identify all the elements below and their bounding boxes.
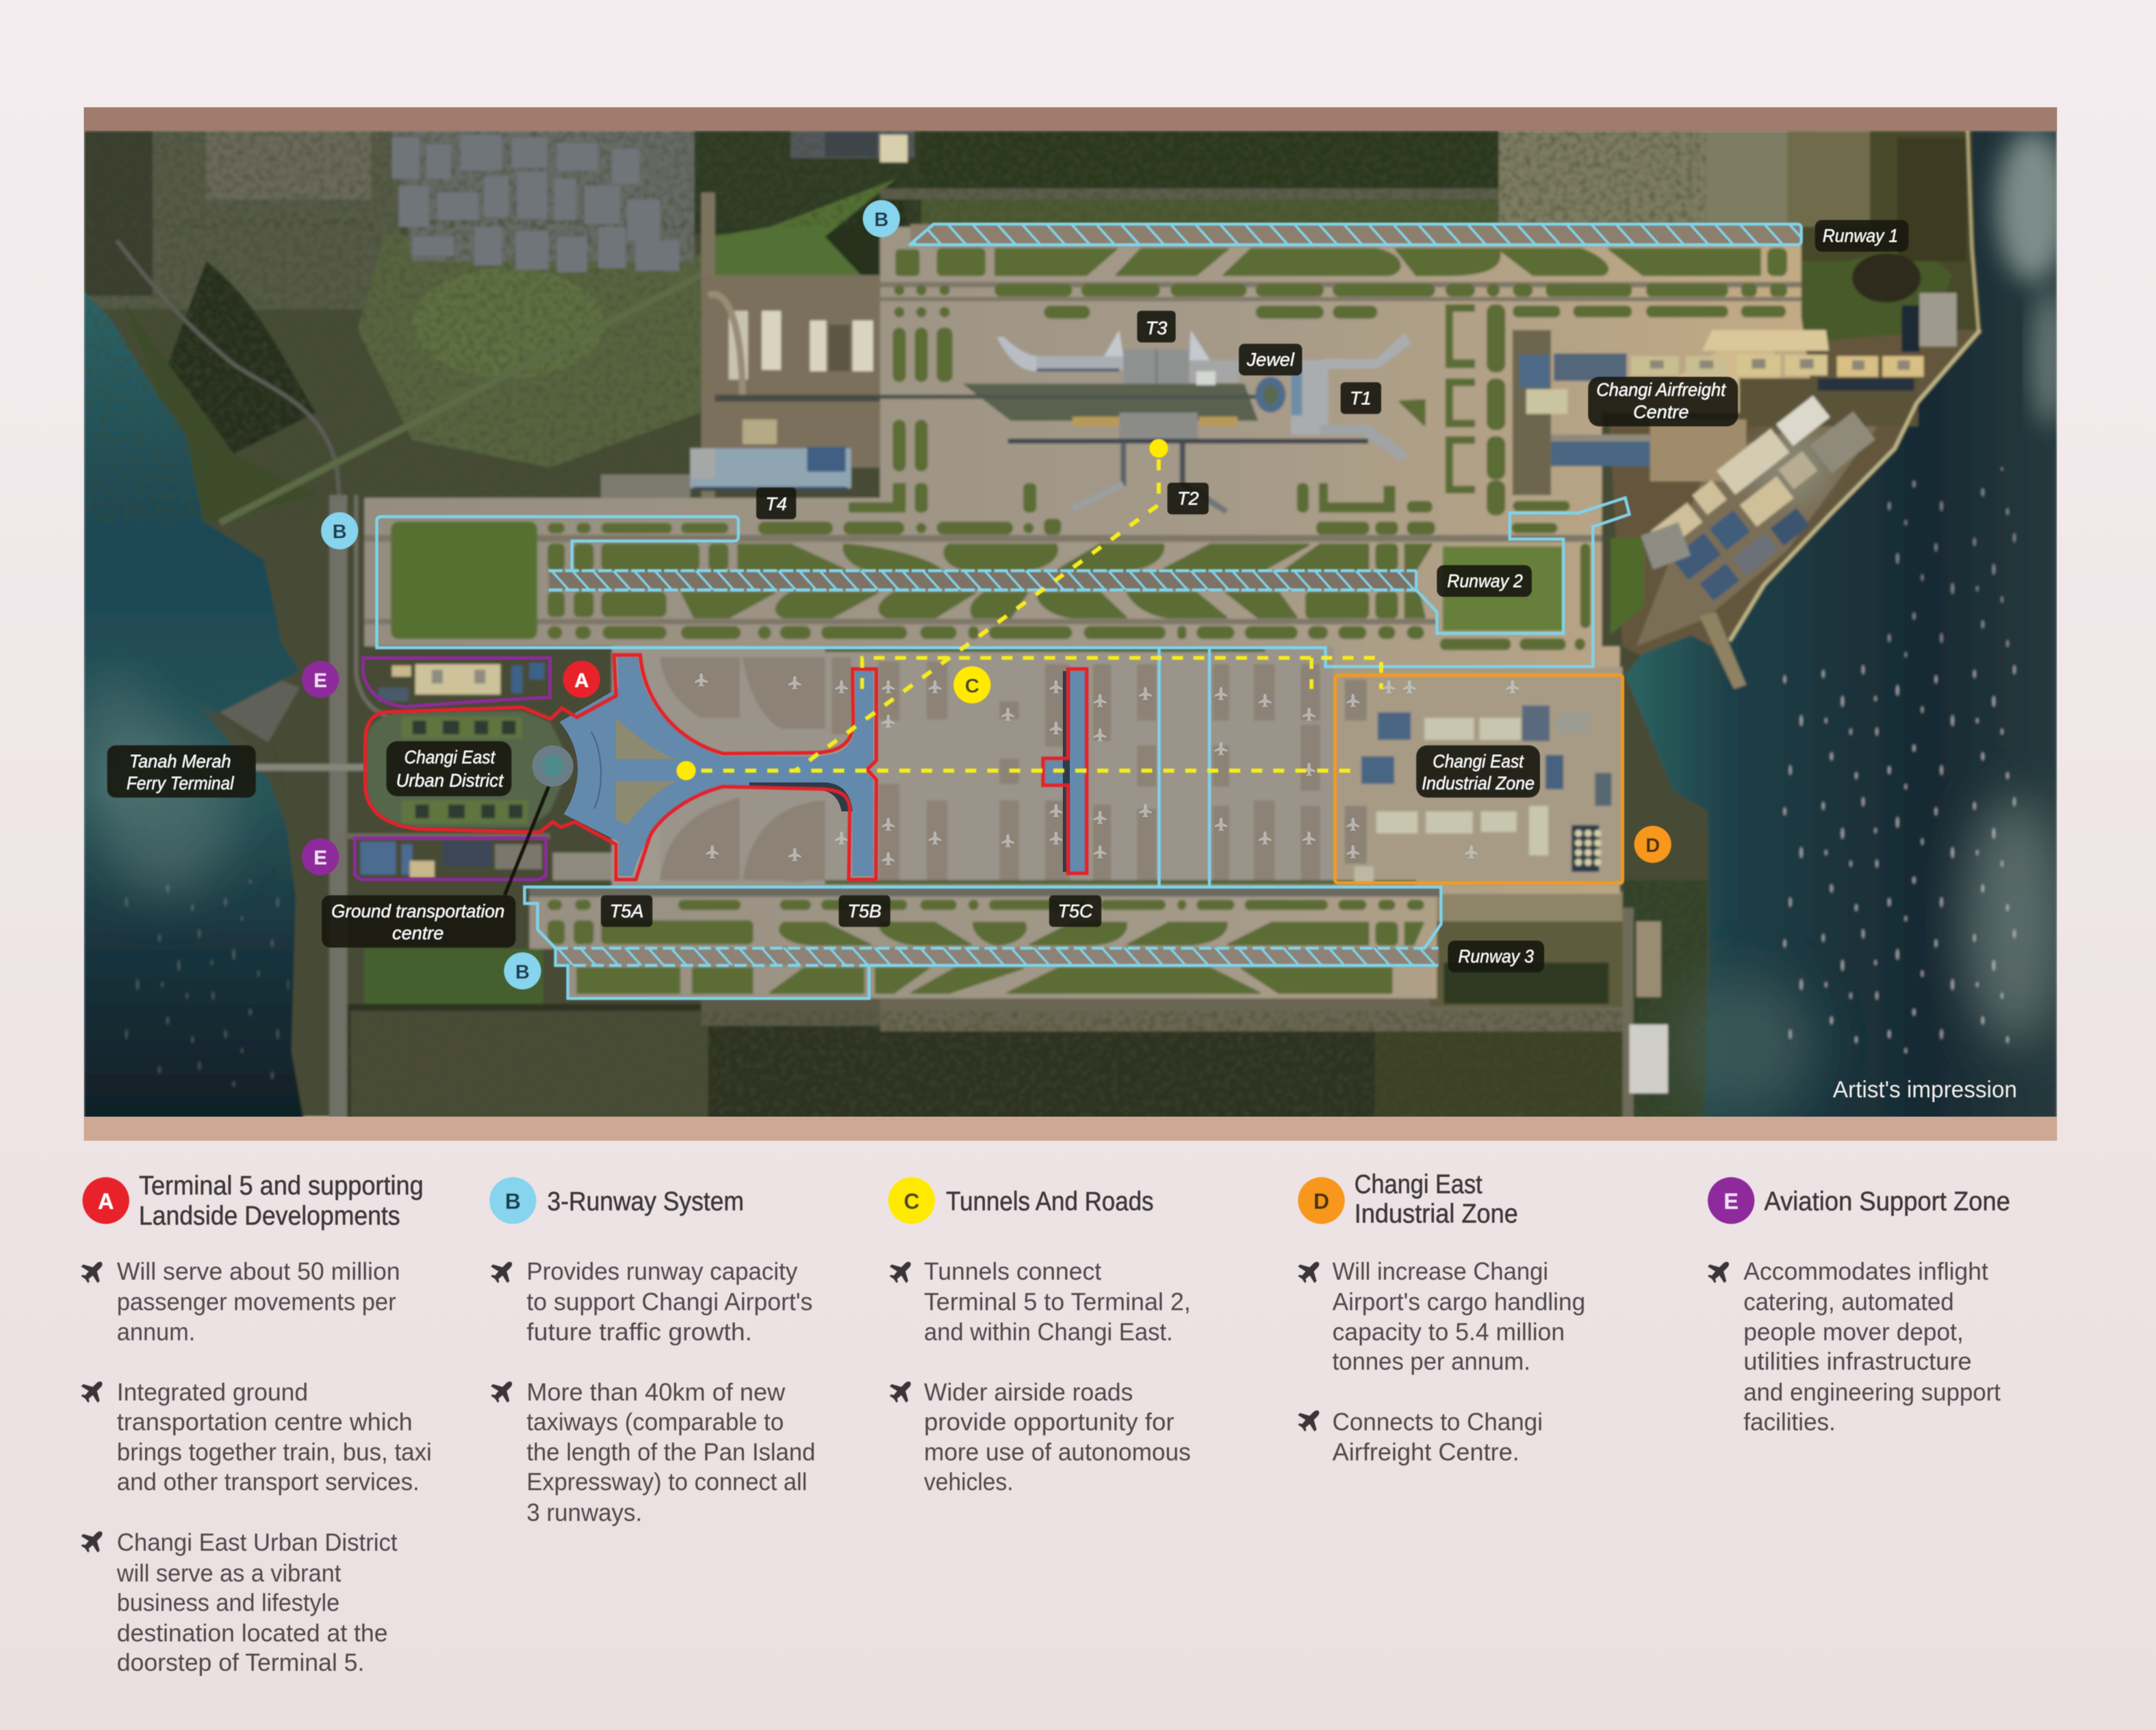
heading A — [139, 1171, 424, 1231]
badge D — [1298, 1177, 1345, 1224]
label: Runway 2 — [1437, 565, 1532, 597]
bullet E1: facilities. — [1743, 1408, 1836, 1436]
heading A: Landside Developments — [139, 1202, 400, 1231]
bullet C1: Tunnels connect — [924, 1257, 1101, 1285]
label: T5B: T5B — [847, 900, 882, 921]
label: T5A — [601, 895, 652, 927]
bullet A2: brings together train, bus, taxi — [117, 1438, 432, 1466]
zone B: apron taxi lines — [1159, 647, 1209, 887]
map badge: B runway 1 — [863, 200, 900, 237]
label: Tanah Merah Ferry Terminal: Tanah Merah — [129, 750, 231, 771]
bullet C1: Terminal 5 to Terminal 2, — [924, 1287, 1191, 1315]
bullet C2: Wider airside roads — [924, 1378, 1133, 1406]
map badge: D: D — [1645, 835, 1660, 857]
leader line: ground transportation centre — [504, 786, 549, 895]
label: Jewel — [1239, 344, 1302, 376]
zone D: industrial outline — [1335, 675, 1623, 883]
coast sand — [1968, 131, 1979, 333]
heading E: Aviation Support Zone — [1764, 1187, 2010, 1216]
aircraft — [693, 673, 1521, 868]
label: Changi East Urban District: Changi East — [405, 746, 496, 767]
row ty 455 — [549, 627, 561, 638]
map badge: E north: E — [313, 670, 327, 692]
label: Changi Airfreight Centre: Changi Airfreight — [1596, 379, 1727, 400]
bullet D2: Connects to Changi — [1333, 1408, 1543, 1436]
label: T1 — [1341, 383, 1381, 414]
column C: tunnels and roads — [888, 1177, 1191, 1496]
map badge: B runway 3: B — [515, 961, 530, 983]
zone B: runway 3 — [524, 887, 1441, 998]
neighbourhood buildings — [392, 135, 679, 272]
map badge: D — [1634, 826, 1671, 863]
hub inner garden — [542, 755, 564, 777]
label: Changi Airfreight Centre: Centre — [1633, 401, 1689, 422]
map bottom band — [84, 1117, 2057, 1141]
bullet A1: passenger movements per — [117, 1287, 396, 1315]
label: Tanah Merah Ferry Terminal: Ferry Terminal — [127, 772, 234, 793]
label: T3: T3 — [1146, 317, 1167, 338]
south rows — [549, 901, 561, 909]
bullet D1: Will increase Changi — [1333, 1257, 1548, 1285]
bullet A2 — [81, 1378, 432, 1496]
label: Runway 3 — [1448, 941, 1544, 972]
map badge: A — [563, 661, 600, 698]
label: Ground transportation centre: centre — [392, 922, 444, 944]
map badge: E north — [302, 661, 339, 698]
support-zone buildings — [344, 663, 612, 880]
zone E: south outline — [355, 838, 546, 879]
bullet C2 — [890, 1378, 1191, 1496]
bullet A2: transportation centre which — [117, 1408, 413, 1436]
map badge: E south — [302, 838, 339, 875]
aerial base image — [75, 131, 2068, 1128]
bullet A1: annum. — [117, 1317, 195, 1345]
T5 terminal building — [560, 658, 1085, 876]
label: T4: T4 — [765, 493, 787, 515]
label: Changi East Urban District — [387, 741, 511, 797]
big lawn — [392, 523, 536, 638]
label: Tanah Merah Ferry Terminal — [107, 745, 256, 798]
label: Changi East Industrial Zone: Industrial Zone — [1422, 772, 1535, 793]
bullet B1: future traffic growth. — [526, 1317, 752, 1345]
label: T5C — [1049, 895, 1101, 927]
map badge: E south: E — [313, 847, 327, 869]
badge B — [489, 1177, 536, 1224]
label: Runway 3: Runway 3 — [1458, 946, 1534, 967]
legend panel — [81, 1170, 2010, 1677]
heading D — [1355, 1170, 1518, 1228]
overlays (crisper than base) — [355, 224, 1801, 998]
bullet B2: Expressway) to connect all — [526, 1468, 807, 1496]
bullet B2: 3 runways. — [526, 1499, 642, 1527]
bullet A3: doorstep of Terminal 5. — [117, 1649, 364, 1677]
label: T5C: T5C — [1057, 900, 1093, 921]
bullet B2: the length of the Pan Island — [526, 1438, 815, 1466]
bullet B1: Provides runway capacity — [526, 1257, 797, 1285]
badge D: D — [1313, 1189, 1329, 1213]
map top band — [84, 107, 2057, 131]
urban hub ring — [532, 745, 574, 786]
map badge: B runway 2: B — [333, 521, 347, 543]
bullet C1: and within Changi East. — [924, 1317, 1173, 1345]
panel: map — [75, 107, 2068, 1141]
label: T3 — [1137, 311, 1176, 342]
column E: aviation support — [1708, 1177, 2010, 1436]
bullet D1: capacity to 5.4 million — [1333, 1317, 1565, 1345]
bullet A1 — [81, 1257, 400, 1345]
badge A — [83, 1177, 129, 1224]
row below runway 2 — [549, 593, 564, 616]
bullet B2: taxiways (comparable to — [526, 1408, 784, 1436]
label: Ground transportation centre: Ground transportation — [331, 900, 504, 921]
label: Ground transportation centre — [322, 895, 515, 948]
clouds and foam — [1997, 131, 2068, 282]
label: Changi East Urban District: Urban District — [396, 769, 504, 790]
label: T2 — [1168, 482, 1209, 515]
label: Jewel: Jewel — [1246, 349, 1295, 370]
bullet A3: Changi East Urban District — [117, 1528, 398, 1556]
badge E — [1708, 1177, 1754, 1224]
bullet A3: destination located at the — [117, 1618, 388, 1647]
roads — [117, 241, 339, 502]
map badge: C: C — [965, 675, 979, 697]
airfield ground — [364, 227, 1815, 998]
map badge: C — [953, 667, 990, 703]
airfreight ground — [1513, 330, 1551, 495]
bullet D1: Airport's cargo handling — [1333, 1287, 1585, 1315]
heading B: 3-Runway System — [548, 1187, 744, 1216]
label: Changi East Industrial Zone — [1416, 745, 1540, 798]
bullet A2: and other transport services. — [117, 1468, 420, 1496]
bullet C2: more use of autonomous — [924, 1438, 1191, 1466]
column B: runway system — [489, 1177, 815, 1527]
bullet B2 — [491, 1378, 815, 1527]
heading D: Changi East — [1355, 1170, 1483, 1200]
label: Runway 1: Runway 1 — [1823, 225, 1898, 246]
bullet B1: to support Changi Airport's — [526, 1287, 812, 1315]
left sea — [84, 292, 304, 1121]
badge C — [888, 1177, 935, 1224]
zone A: Terminal 5 red outline — [365, 655, 876, 879]
bullet E1: utilities infrastructure — [1743, 1347, 1972, 1376]
bullet D2 — [1298, 1408, 1543, 1466]
taxiway islands — [392, 249, 1786, 993]
badge C: C — [903, 1189, 920, 1213]
bullet B1 — [491, 1257, 812, 1345]
bullet D2: Airfreight Centre. — [1333, 1438, 1519, 1466]
label: T5A: T5A — [610, 900, 643, 921]
zone B: runway 1 — [910, 224, 1801, 245]
bullet A3: will serve as a vibrant — [116, 1559, 341, 1587]
bullet A2: Integrated ground — [117, 1378, 308, 1406]
bullet C1 — [890, 1257, 1191, 1345]
bullet A1: Will serve about 50 million — [117, 1257, 400, 1285]
zone B: runway 2 — [376, 498, 1630, 667]
map labels — [107, 200, 2017, 1103]
T4 area — [601, 474, 690, 498]
bullet D1 — [1298, 1257, 1585, 1376]
label: Runway 2: Runway 2 — [1447, 570, 1523, 591]
label: Changi East Industrial Zone: Changi East — [1433, 750, 1524, 771]
central terminal cluster — [962, 384, 1258, 421]
bullet A3: business and lifestyle — [117, 1588, 339, 1616]
column D: industrial zone — [1298, 1170, 1585, 1466]
zone E: north outline — [363, 658, 550, 707]
right sea — [1626, 131, 2057, 1121]
label: T1: T1 — [1350, 387, 1372, 409]
bullet E1: catering, automated — [1743, 1287, 1954, 1315]
bullet E1: and engineering support — [1743, 1378, 2001, 1406]
land colour patches — [84, 131, 400, 309]
bullet E1: Accommodates inflight — [1743, 1257, 1988, 1285]
map badge: B runway 2 — [321, 513, 358, 550]
label: Changi Airfreight Centre — [1588, 377, 1738, 426]
east zone buildings — [1355, 706, 1611, 883]
map badge: A: A — [574, 670, 589, 692]
column A: Terminal 5 — [81, 1171, 432, 1677]
urban district ground — [365, 711, 571, 828]
apron wide line strips — [825, 647, 1265, 652]
bullet C2: provide opportunity for — [924, 1408, 1175, 1436]
badge B: B — [505, 1189, 521, 1213]
caption: Artist's impression: Artist's impression — [1833, 1077, 2017, 1103]
noise texture — [84, 131, 1706, 227]
bullet D1: tonnes per annum. — [1333, 1347, 1530, 1376]
map badge: B runway 3 — [504, 953, 541, 990]
zone C: tunnels and roads — [676, 439, 1381, 780]
bullet E1: people mover depot, — [1743, 1317, 1964, 1345]
heading D: Industrial Zone — [1355, 1199, 1518, 1228]
zone A: Terminal 5C red outline — [1043, 669, 1087, 873]
map badge: B runway 1: B — [874, 209, 888, 231]
bullet E1 — [1708, 1257, 2001, 1436]
label: T5B — [838, 895, 890, 927]
airfreight buildings — [1519, 253, 1980, 689]
bullet C2: vehicles. — [924, 1468, 1014, 1496]
bullet A3 — [81, 1528, 398, 1677]
label: Runway 1 — [1815, 220, 1908, 252]
heading C: Tunnels And Roads — [946, 1187, 1153, 1216]
east road buildings — [1637, 921, 1661, 997]
label: T2: T2 — [1177, 487, 1199, 509]
badge A: A — [98, 1189, 114, 1213]
heading A: Terminal 5 and supporting — [139, 1171, 424, 1200]
row above runway 2 — [549, 524, 564, 532]
apron stands — [612, 658, 1367, 883]
badge E: E — [1724, 1189, 1738, 1213]
label: T4 — [756, 488, 796, 519]
runway strips — [910, 224, 1801, 245]
bullet B2: More than 40km of new — [526, 1378, 786, 1406]
